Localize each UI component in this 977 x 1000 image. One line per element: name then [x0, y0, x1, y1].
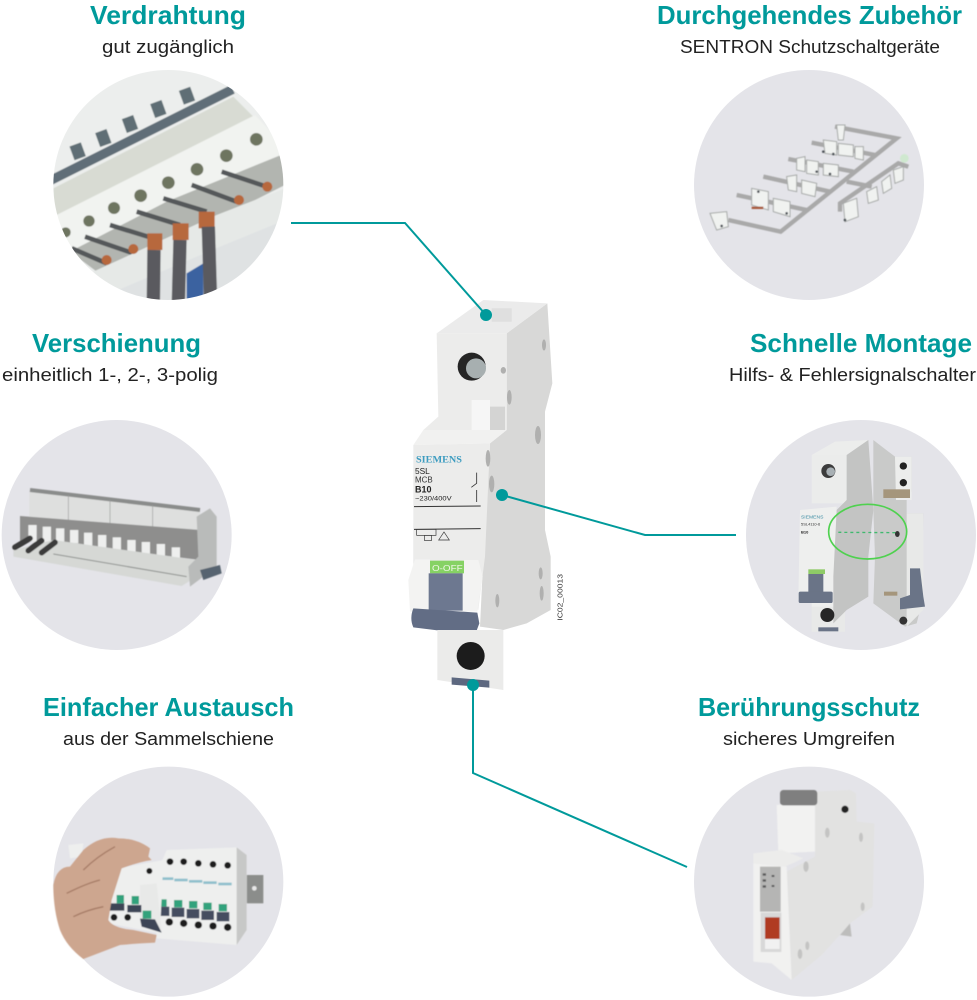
photo: breaker and auxiliary switch: 5SL4110-6: [801, 522, 821, 527]
heading: Durchgehendes Zubehör: Durchgehendes Zubehör: [657, 0, 962, 30]
bottom terminal: [437, 630, 503, 690]
panel: Einfacher Austausch: [43, 692, 294, 997]
heading: Verschienung: Verschienung: [32, 328, 201, 358]
image reference code: IC02_00013: [555, 574, 564, 621]
rating labels: B10: [415, 485, 431, 495]
side holes: [486, 339, 546, 607]
rating box and symbol: [417, 529, 449, 541]
connector: touch protection to device bottom: [467, 679, 687, 867]
photo: wiring of breakers: [53, 70, 284, 300]
subheading: gut zugänglich: gut zugänglich: [102, 37, 234, 57]
rating labels: [415, 466, 453, 503]
device side face: [480, 303, 552, 630]
panel: Schnelle Montage: [729, 328, 976, 650]
handle: O-OFF: [432, 563, 463, 573]
subheading: aus der Sammelschiene: aus der Sammelschiene: [63, 729, 274, 749]
rating labels: ~230/400V: [415, 496, 453, 503]
connector: wiring to device top: [291, 223, 492, 321]
handle: [408, 559, 483, 635]
panel: Verschienung: [2, 328, 232, 650]
rating labels: MCB: [415, 476, 433, 485]
lower front face: [413, 430, 507, 445]
panel: Durchgehendes Zubehör: [657, 0, 962, 300]
heading: Einfacher Austausch: Einfacher Austausch: [43, 692, 294, 722]
subheading: sicheres Umgreifen: sicheres Umgreifen: [723, 729, 895, 749]
photo: hand removing breaker: [53, 767, 283, 997]
subheading: SENTRON Schutzschaltgeräte: SENTRON Schutzschaltgeräte: [680, 37, 940, 57]
illustration: accessory system diagram: [694, 70, 924, 300]
panel: Berührungsschutz: [694, 692, 924, 997]
photo: breaker and auxiliary switch: B10: [801, 529, 809, 534]
subheading: Hilfs- & Fehlersignalschalter: Hilfs- & Fehlersignalschalter: [729, 365, 976, 385]
upper front face: [423, 333, 507, 430]
circuit symbol: [471, 473, 477, 502]
brand: SIEMENS: SIEMENS: [416, 454, 462, 464]
rating labels: 5SL: [415, 466, 430, 476]
connector: quick mount to device side: [496, 489, 736, 535]
illustration: busbar assembly: [2, 420, 232, 650]
central product: 5SL miniature circuit breaker: [408, 300, 564, 690]
heading: Verdrahtung: Verdrahtung: [90, 0, 246, 30]
heading: Schnelle Montage: Schnelle Montage: [750, 328, 972, 358]
photo: breaker and auxiliary switch: SIEMENS: [801, 514, 824, 520]
panel: Verdrahtung: [53, 5, 284, 300]
photo: breaker and auxiliary switch: [746, 420, 976, 650]
device top face: [437, 300, 547, 333]
heading: Berührungsschutz: Berührungsschutz: [698, 692, 920, 722]
screw terminal: [458, 353, 486, 381]
photo: touch protection view: [694, 767, 924, 997]
subheading: einheitlich 1-, 2-, 3-polig: einheitlich 1-, 2-, 3-polig: [2, 365, 218, 385]
